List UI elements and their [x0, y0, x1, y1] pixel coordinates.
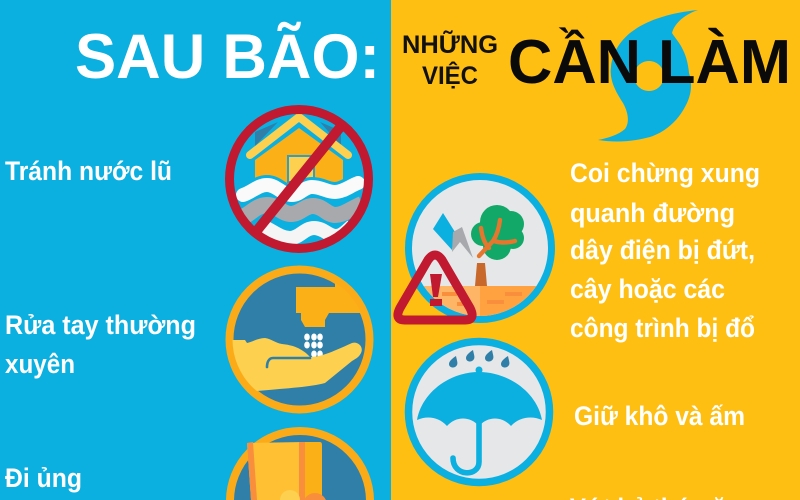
panel: right yellow background [391, 0, 800, 500]
panel: left blue background [0, 0, 391, 500]
icon: hurricane symbol [598, 10, 698, 141]
icon: warning triangle [398, 255, 472, 320]
heading: NHỮNG VIỆC [402, 29, 498, 90]
text: wash hands often [5, 310, 196, 379]
text: stay dry and warm: Giữ khô và ấm [574, 401, 745, 431]
heading: NHỮNG VIỆC: NHỮNG [402, 29, 498, 59]
icon: umbrella [408, 342, 550, 482]
text: watch for downed lines: quanh đường [570, 198, 735, 228]
text: watch for downed lines: dây điện bị đứt, [570, 235, 755, 265]
text: wash hands often: xuyên [5, 349, 75, 379]
text: watch for downed lines: Coi chừng xung [570, 158, 760, 188]
text: wear boots: Đi ủng [5, 463, 82, 493]
heading: NHỮNG VIỆC: VIỆC [422, 60, 478, 90]
icon: no flooded house [230, 110, 368, 248]
icon: washing hands [225, 270, 370, 410]
text: wash hands often: Rửa tay thường [5, 310, 196, 340]
text: watch for downed lines: cây hoặc các [570, 274, 725, 304]
text: avoid flood water: Tránh nước lũ [5, 156, 172, 186]
heading: CẦN LÀM: CẦN LÀM [508, 28, 791, 97]
title: SAU BÃO: SAU BÃO: [75, 21, 380, 92]
icon: boots [230, 431, 370, 500]
icon: downed lines and tree [400, 176, 560, 326]
text: watch for downed lines [570, 158, 760, 343]
text: watch for downed lines: công trình bị đổ [570, 313, 755, 343]
